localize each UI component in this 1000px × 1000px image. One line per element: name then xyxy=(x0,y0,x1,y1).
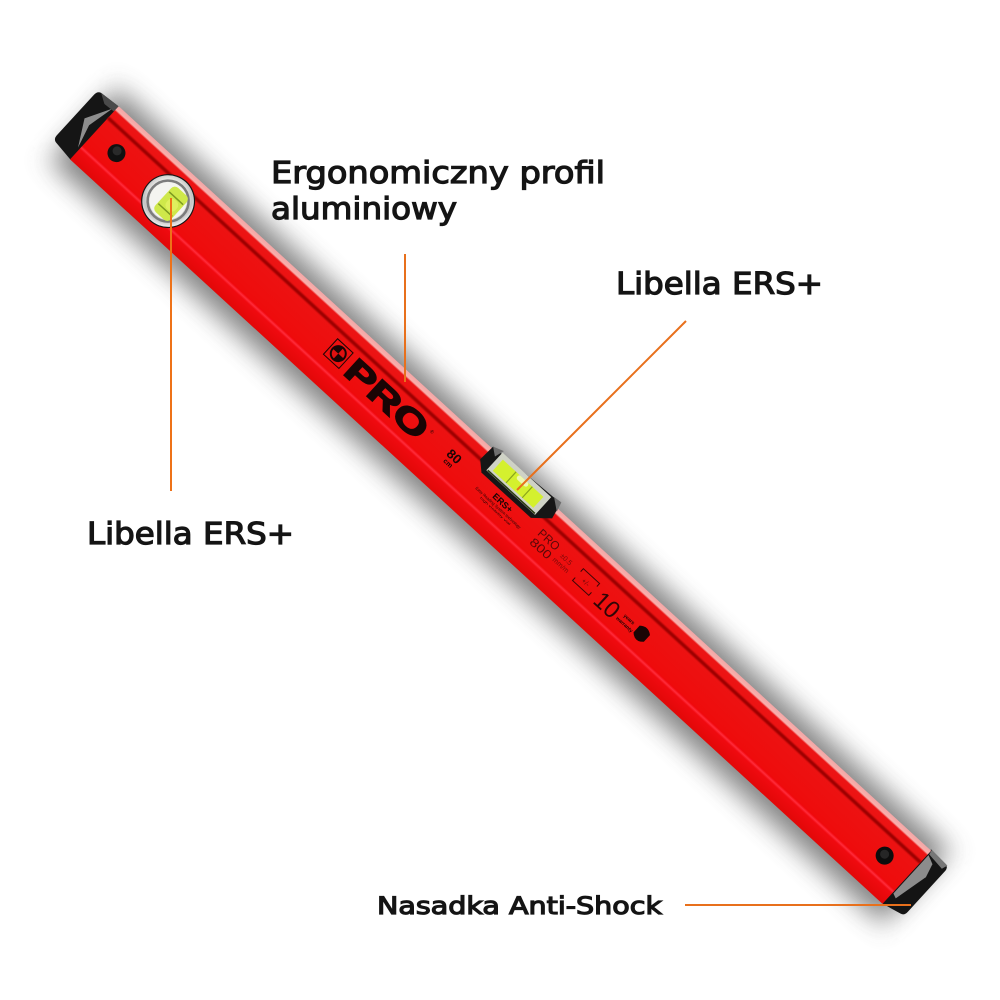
ERS+ marking: high visibility vial xyxy=(479,496,512,526)
model marking: PRO xyxy=(535,526,563,553)
leader line: end cap xyxy=(685,904,911,906)
length marking: cm xyxy=(441,458,454,470)
accuracy marking xyxy=(551,551,575,575)
label: ergonomic profile: Ergonomiczny profil xyxy=(271,156,605,191)
model marking: 800 xyxy=(527,535,555,562)
profile groove xyxy=(107,117,922,864)
leader line: profile xyxy=(404,254,406,382)
shadow xyxy=(50,87,950,924)
end cap: top left xyxy=(51,89,119,160)
red aluminium profile xyxy=(70,106,931,904)
end cap: bottom right xyxy=(882,849,950,920)
mounting hole: left xyxy=(104,140,129,166)
logo wordmark: PRO xyxy=(337,351,437,447)
warranty marking: warranty xyxy=(614,615,634,634)
registered mark: ® xyxy=(428,428,436,436)
warranty icon xyxy=(631,623,652,644)
accuracy icon: +/- xyxy=(580,578,591,589)
spirit level xyxy=(41,79,958,931)
round vial xyxy=(130,163,206,239)
accuracy marking: mm/m xyxy=(551,557,570,575)
leader line: round vial xyxy=(170,198,172,491)
mounting hole: right xyxy=(872,843,897,868)
accuracy icon xyxy=(573,569,600,595)
warranty marking xyxy=(588,587,643,640)
ERS+ marking: Easy Reading System technology xyxy=(474,486,522,530)
leader line: horizontal vial xyxy=(517,321,686,490)
label: end cap: Nasadka Anti-Shock xyxy=(377,892,662,920)
ERS+ marking: ERS+ xyxy=(490,491,515,515)
accuracy marking: ±0.5 xyxy=(558,553,573,567)
label: left vial: Libella ERS+ xyxy=(87,517,294,552)
logo mark xyxy=(323,339,353,368)
length marking: 80 xyxy=(444,446,465,467)
PRO logo xyxy=(318,333,442,451)
label: ergonomic profile: aluminiowy xyxy=(271,192,457,227)
horizontal vial window xyxy=(474,442,564,529)
label: right vial: Libella ERS+ xyxy=(616,267,823,302)
ERS+ marking xyxy=(472,479,528,533)
warranty marking: 10 xyxy=(588,587,625,624)
model marking xyxy=(527,526,563,562)
warranty marking: years xyxy=(622,613,636,627)
length marking xyxy=(440,446,465,471)
